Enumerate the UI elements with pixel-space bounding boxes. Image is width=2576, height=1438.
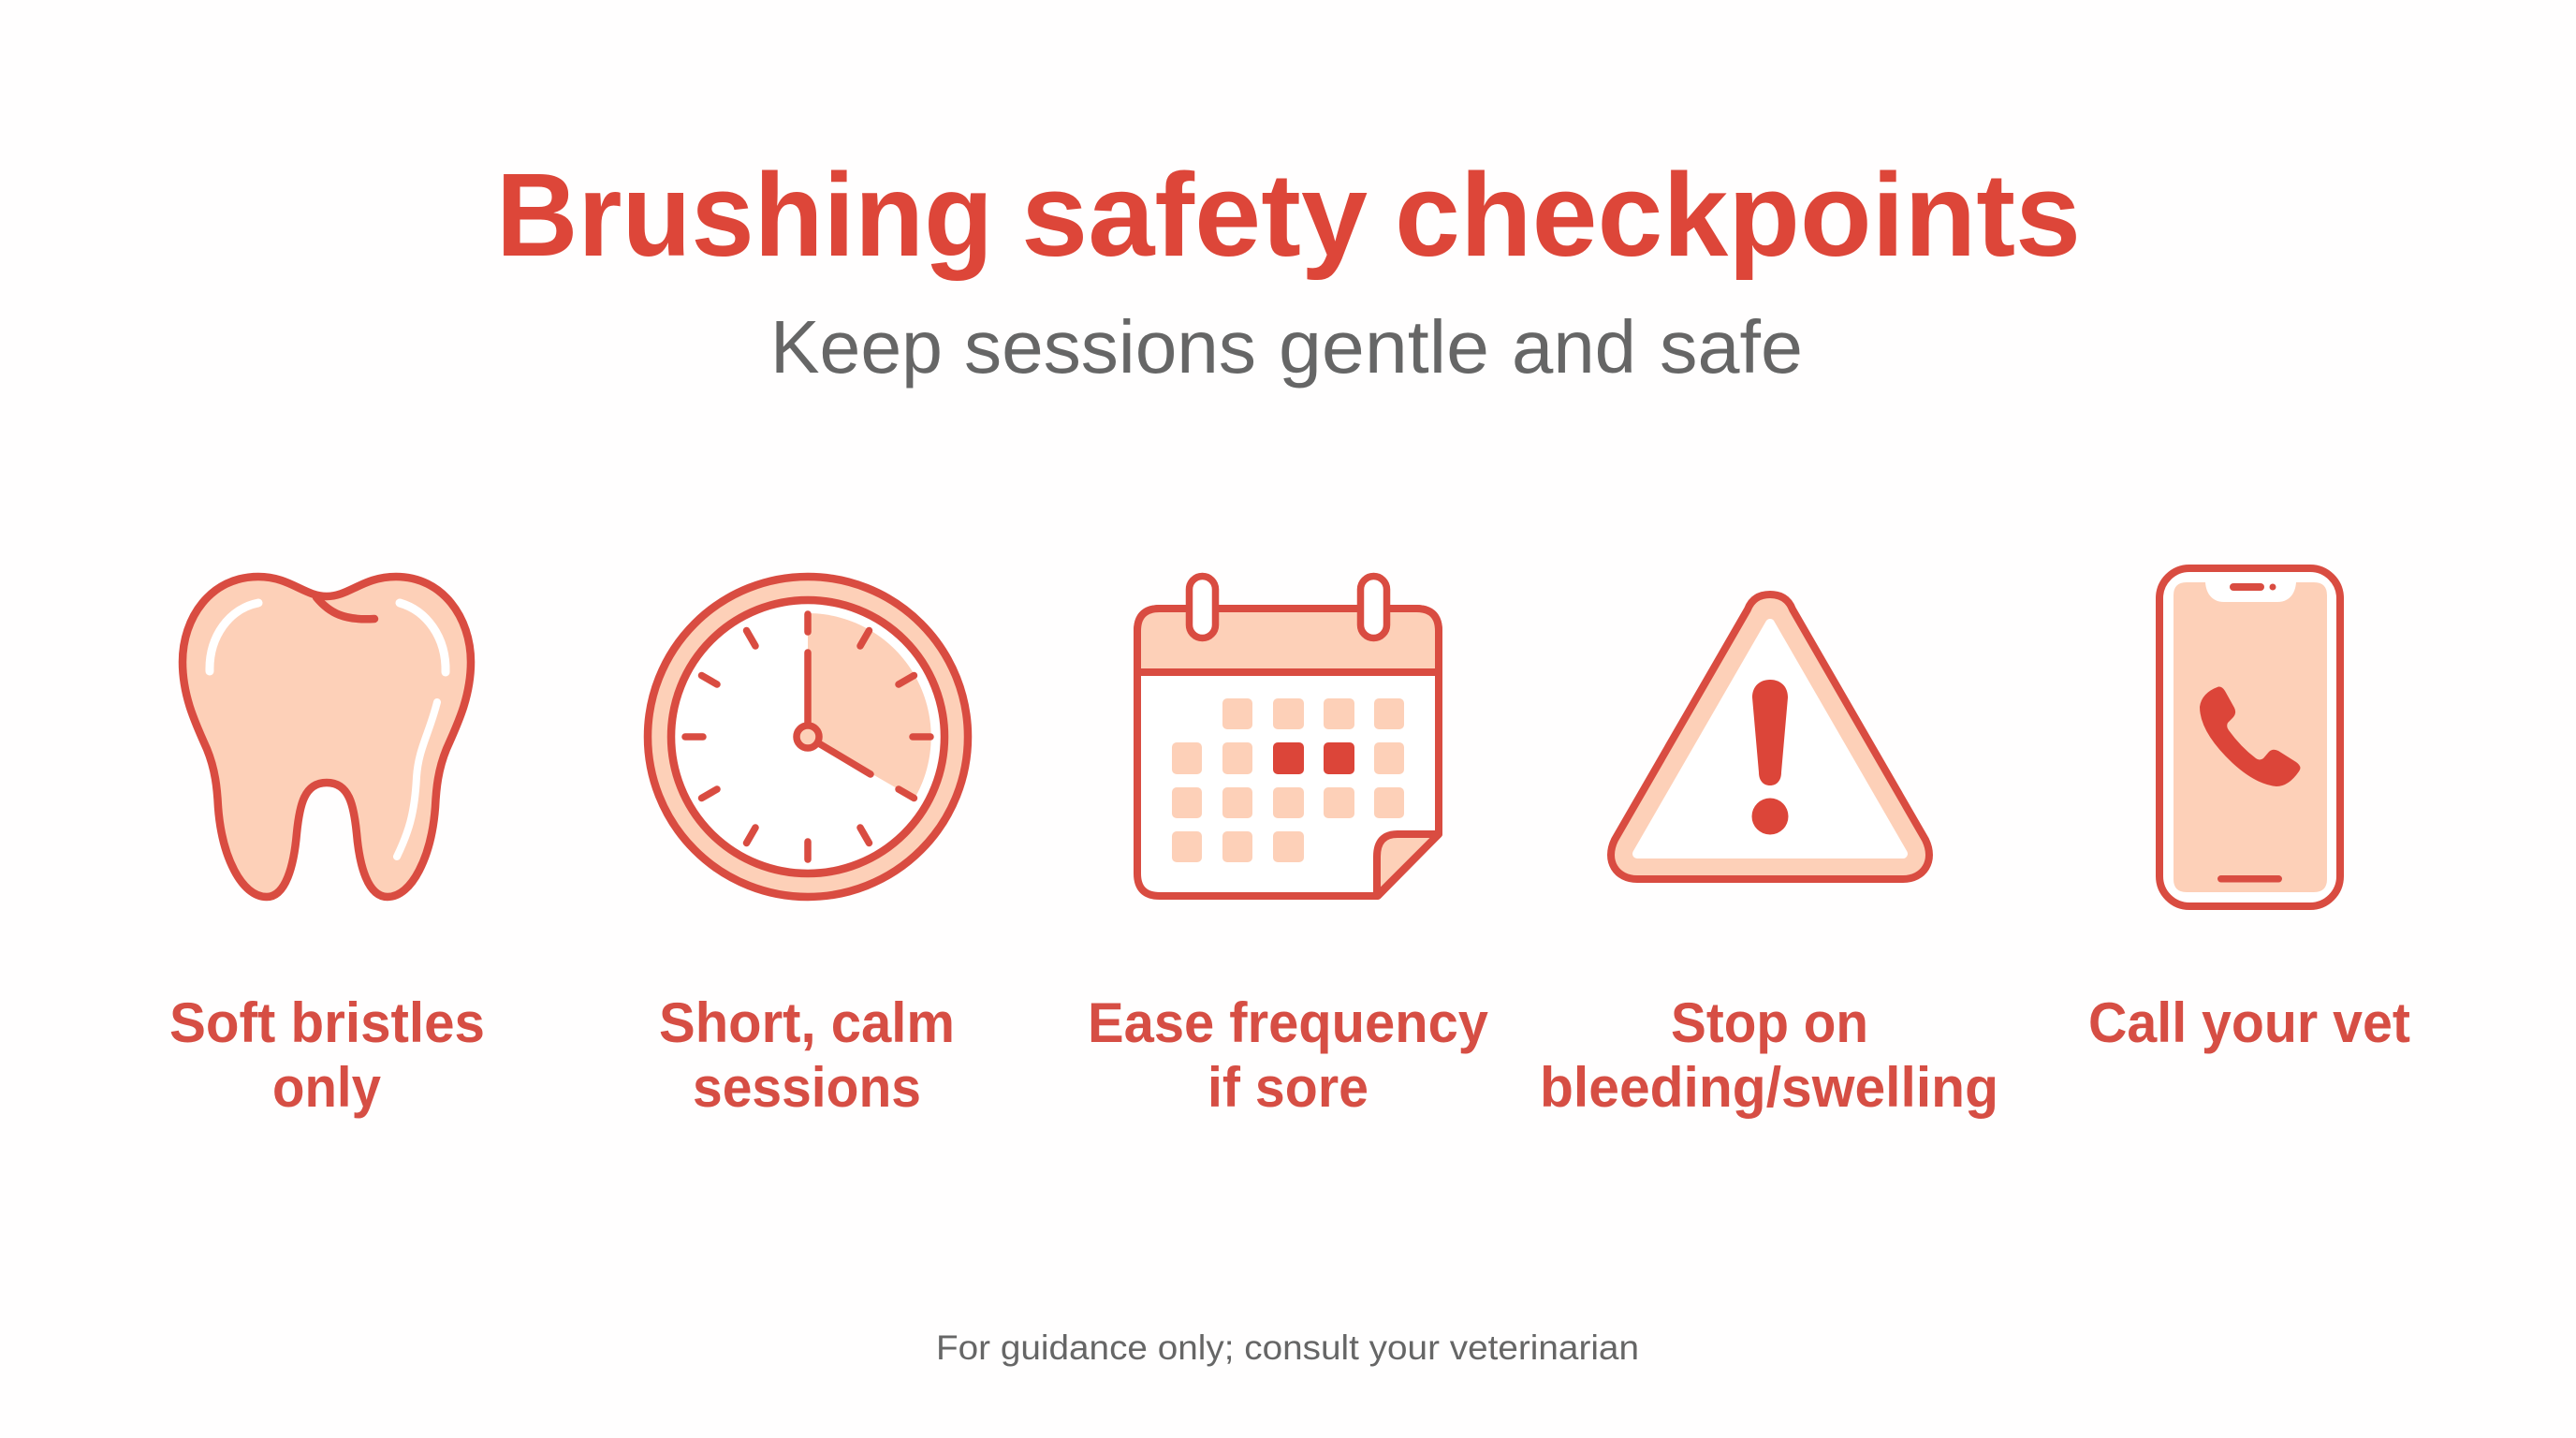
label: call your vet: Call your vet [2088, 991, 2410, 1054]
label: stop on bleeding: bleeding/swelling [1540, 1056, 1998, 1119]
subtitle: Keep [770, 305, 943, 389]
icon: phone [2159, 568, 2340, 906]
label: ease frequency: if sore [1208, 1056, 1368, 1119]
title: safety [1021, 149, 1368, 281]
label: ease frequency: Ease frequency [1088, 991, 1489, 1054]
subtitle: sessions [964, 305, 1256, 389]
title: Brushing [496, 149, 993, 281]
label: short calm sessions: sessions [693, 1056, 921, 1119]
footer disclaimer: For guidance only; consult your veterinarian [936, 1328, 1639, 1367]
label: short calm sessions: Short, calm [659, 991, 955, 1054]
icon: warning triangle [1611, 594, 1929, 879]
subtitle: safe [1660, 305, 1803, 389]
label: stop on bleeding: Stop on [1671, 991, 1868, 1054]
subtitle: and [1512, 305, 1636, 389]
icon: tooth [183, 577, 471, 897]
subtitle: gentle [1279, 305, 1489, 389]
title: checkpoints [1395, 149, 2081, 281]
label: soft bristles: only [272, 1056, 382, 1119]
label: soft bristles: Soft bristles [169, 991, 485, 1054]
icon: clock [648, 577, 968, 897]
icon: calendar [1137, 577, 1439, 896]
